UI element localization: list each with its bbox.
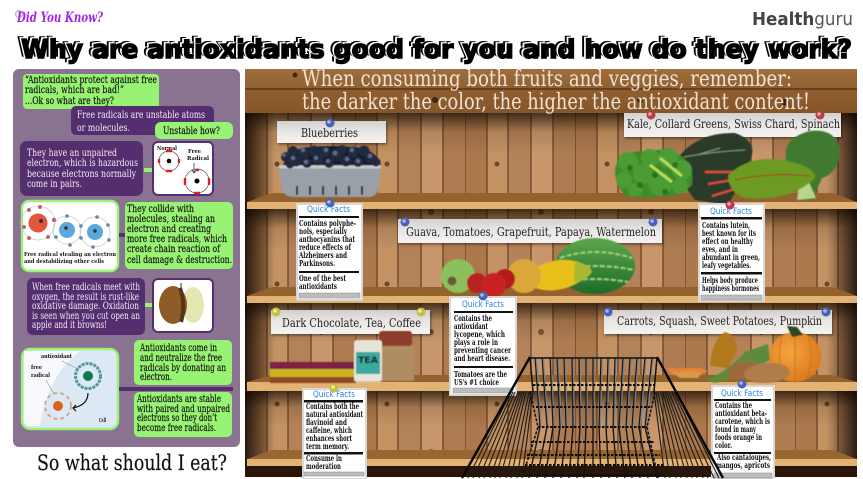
diagram: antioxidant neutralizing free radical: free — [31, 365, 42, 371]
food: carrots, squash, sweet potatoes, pumpkin — [667, 326, 821, 385]
quick facts: carrots group: foods orange in — [715, 432, 762, 442]
quick facts: chocolate group: Consume in — [306, 453, 342, 463]
quick facts: guava group: Contains the — [454, 313, 492, 323]
callout: antioxidants are stable: with paired and unpaired — [137, 403, 230, 415]
quick facts: blueberries: Parkinsons. — [299, 258, 335, 268]
quick facts: carrots group: carotene, which is — [715, 416, 770, 426]
quick facts: kale group: eyes, and in — [702, 244, 738, 254]
callout: they collide with molecules: They collide with — [127, 203, 194, 215]
quick facts: carrots group: antioxidant beta- — [715, 408, 767, 418]
callout: unpaired electron: They have an unpaired — [27, 147, 117, 159]
quick facts: carrots group: found in many — [715, 424, 756, 434]
diagram: antioxidant neutralizing free radical — [22, 349, 118, 429]
callout: antioxidants protect: “Antioxidants protect against free — [25, 74, 157, 86]
quick facts: blueberries — [297, 198, 362, 300]
callout: oxidation: is seen when you cut open an — [32, 310, 140, 322]
quick facts: chocolate group: enhances short — [306, 433, 352, 443]
food: chocolate, tea, coffee — [270, 331, 414, 383]
callout: antioxidants are stable — [134, 392, 232, 437]
callout: antioxidants are stable: become free radicals. — [137, 422, 216, 434]
label: carrots group — [604, 308, 832, 334]
diagram: free radical stealing electron: Free radical stealing an electron — [24, 252, 116, 258]
quick facts: guava group — [450, 292, 516, 395]
quick facts: guava group: Tomatoes are the — [454, 369, 507, 379]
label: guava group — [398, 218, 662, 243]
quick facts: guava group: antioxidant — [454, 321, 488, 331]
quick facts: guava group: plays a role in — [454, 337, 498, 347]
label: blueberries: Blueberries — [301, 125, 358, 140]
quick facts: carrots group: Quick Facts — [721, 389, 763, 399]
quick facts: guava group: Quick Facts — [462, 300, 504, 310]
quick facts: blueberries: reduce effects of — [299, 242, 351, 252]
food: chocolate, tea, coffee: TEA — [358, 356, 378, 366]
quick facts: guava group: US's #1 choice — [454, 377, 499, 387]
callout: they collide with molecules: molecules, stealing an — [127, 213, 215, 225]
diagram: free radical stealing electron: and destabilizing other cells — [24, 259, 104, 265]
quick facts: guava group: preventing cancer — [454, 345, 512, 355]
diagram: normal and free radical atoms: Free — [188, 149, 201, 155]
quick facts: blueberries: anthocyanins that — [299, 234, 355, 244]
callout: oxidation: oxidative damage. Oxidation — [32, 300, 139, 312]
diagram: antioxidant neutralizing free radical: radical — [31, 373, 50, 379]
quick facts: chocolate group: Quick Facts — [313, 390, 355, 400]
quick facts: blueberries: One of the best — [299, 273, 346, 283]
diagram: antioxidant neutralizing free radical: Cell — [99, 418, 106, 424]
callout: oxidation — [27, 278, 145, 335]
callout: antioxidants protect — [23, 74, 159, 109]
diagram: free radical stealing electron — [21, 201, 118, 271]
callout: oxidation: apple and it browns! — [32, 319, 107, 331]
quick facts: chocolate group: caffeine, which — [306, 425, 352, 435]
callout: antioxidants neutralize: Antioxidants come in — [139, 342, 217, 354]
quick facts: kale group: abundant in green, — [702, 252, 760, 262]
quick facts: carrots group: mangos, apricots — [716, 460, 770, 470]
quick facts: blueberries: Contains polyphe- — [299, 218, 356, 228]
quick facts: chocolate group: Contains both the — [306, 401, 359, 411]
callout: oxidation: When free radicals meet with — [32, 281, 140, 293]
quick facts: kale group: effect on healthy — [702, 236, 753, 246]
callout: antioxidants are stable: electrons so they don’t — [137, 412, 218, 424]
callout: free radicals are unstable — [71, 106, 214, 135]
callout: unstable how: Unstable how? — [163, 125, 220, 137]
panel: what are free radicals — [13, 69, 240, 447]
quick facts: kale group: leafy vegetables. — [702, 260, 751, 270]
quick facts: blueberries: Alzheimers and — [298, 250, 347, 260]
callout: unstable how — [155, 122, 233, 139]
diagram: antioxidant neutralizing free radical: antioxidant — [41, 354, 72, 360]
quick facts: chocolate group: moderation — [306, 461, 341, 471]
callout: antioxidants protect: radicals, which are bad!” — [25, 84, 124, 96]
quick facts: carrots group: color. — [715, 440, 732, 450]
label: kale group — [624, 110, 841, 137]
diagram: normal and free radical atoms: Normal — [157, 146, 177, 152]
panel: wooden shelves — [245, 67, 857, 477]
quick facts: kale group: best known for its — [702, 228, 756, 238]
quick facts: chocolate group: natural antioxidant — [306, 409, 363, 419]
callout: antioxidants neutralize — [134, 340, 232, 385]
callout: they collide with molecules: more free radicals, which — [127, 233, 227, 245]
food: kale, collard greens, chard, spinach — [615, 131, 840, 205]
callout: oxidation: oxygen, the result is rust-like — [32, 291, 139, 303]
callout: antioxidants are stable: Antioxidants are stable — [136, 393, 221, 405]
quick facts: carrots group: Also cantaloupes, — [716, 452, 771, 462]
quick facts: chocolate group: term memory. — [306, 441, 349, 451]
callout: unpaired electron — [20, 141, 143, 196]
heading: so what should I eat: So what should I eat? — [37, 451, 227, 475]
title: Why are antioxidants good for you and how do they work? — [21, 35, 852, 65]
logo: Did You Know: Did You Know? — [16, 10, 104, 26]
quick facts: blueberries: Quick Facts — [307, 205, 350, 215]
callout: they collide with molecules: create chain reaction of — [127, 243, 221, 255]
diagram: normal and free radical atoms — [153, 142, 213, 195]
callout: free radicals are unstable: or molecules. — [77, 122, 130, 134]
quick facts: kale group: Helps body produce — [702, 275, 758, 285]
label: guava group: Guava, Tomatoes, Grapefruit, Papaya, Watermelon — [406, 224, 656, 239]
quick facts: kale group — [699, 200, 764, 301]
quick facts: guava group: and heart disease. — [454, 353, 510, 363]
callout: free radicals are unstable: Free radicals are unstable atoms — [77, 109, 205, 121]
top banner board — [245, 69, 857, 113]
callout: antioxidants neutralize: and neutralize the free — [140, 352, 222, 364]
logo: Healthguru: Healthguru — [752, 9, 853, 30]
callout: antioxidants protect: ...Ok so what are they? — [25, 95, 114, 107]
food: guava, tomatoes, grapefruit, papaya, watermelon — [441, 238, 635, 297]
quick facts: kale group: Contains lutein, — [702, 220, 750, 230]
callout: unpaired electron: electron, which is hazardous — [27, 157, 138, 169]
banner text — [302, 67, 810, 115]
quick facts: blueberries: nols, especially — [299, 226, 347, 236]
callout: they collide with molecules: cell damage & destruction. — [127, 254, 232, 266]
quick facts: blueberries: antioxidants — [299, 281, 337, 291]
quick facts: kale group: Quick Facts — [710, 207, 752, 217]
image: browned apple — [153, 279, 213, 332]
quick facts: carrots group: Contains the — [715, 400, 752, 410]
callout: antioxidants neutralize: electron. — [140, 371, 172, 383]
callout: they collide with molecules: electron and creating — [127, 223, 211, 235]
quick facts: carrots group — [712, 380, 774, 479]
quick facts: guava group: lycopene, which — [454, 329, 505, 339]
label: chocolate group — [271, 308, 430, 334]
callout: they collide with molecules — [125, 202, 233, 269]
quick facts: chocolate group — [303, 384, 366, 479]
food: blueberries — [279, 145, 381, 197]
callout: unpaired electron: come in pairs. — [27, 178, 82, 190]
quick facts: chocolate group: flavinoid and — [306, 417, 347, 427]
label: blueberries — [277, 118, 386, 143]
diagram: normal and free radical atoms: Radical — [187, 156, 209, 162]
callout: antioxidants neutralize: radicals by donating an — [140, 362, 226, 374]
shelf boards — [245, 193, 857, 477]
callout: unpaired electron: because electrons normally — [27, 168, 136, 180]
quick facts: kale group: happiness hormones — [702, 283, 759, 293]
shopping basket — [462, 357, 723, 478]
label: chocolate group: Dark Chocolate, Tea, Coffee — [282, 315, 421, 330]
